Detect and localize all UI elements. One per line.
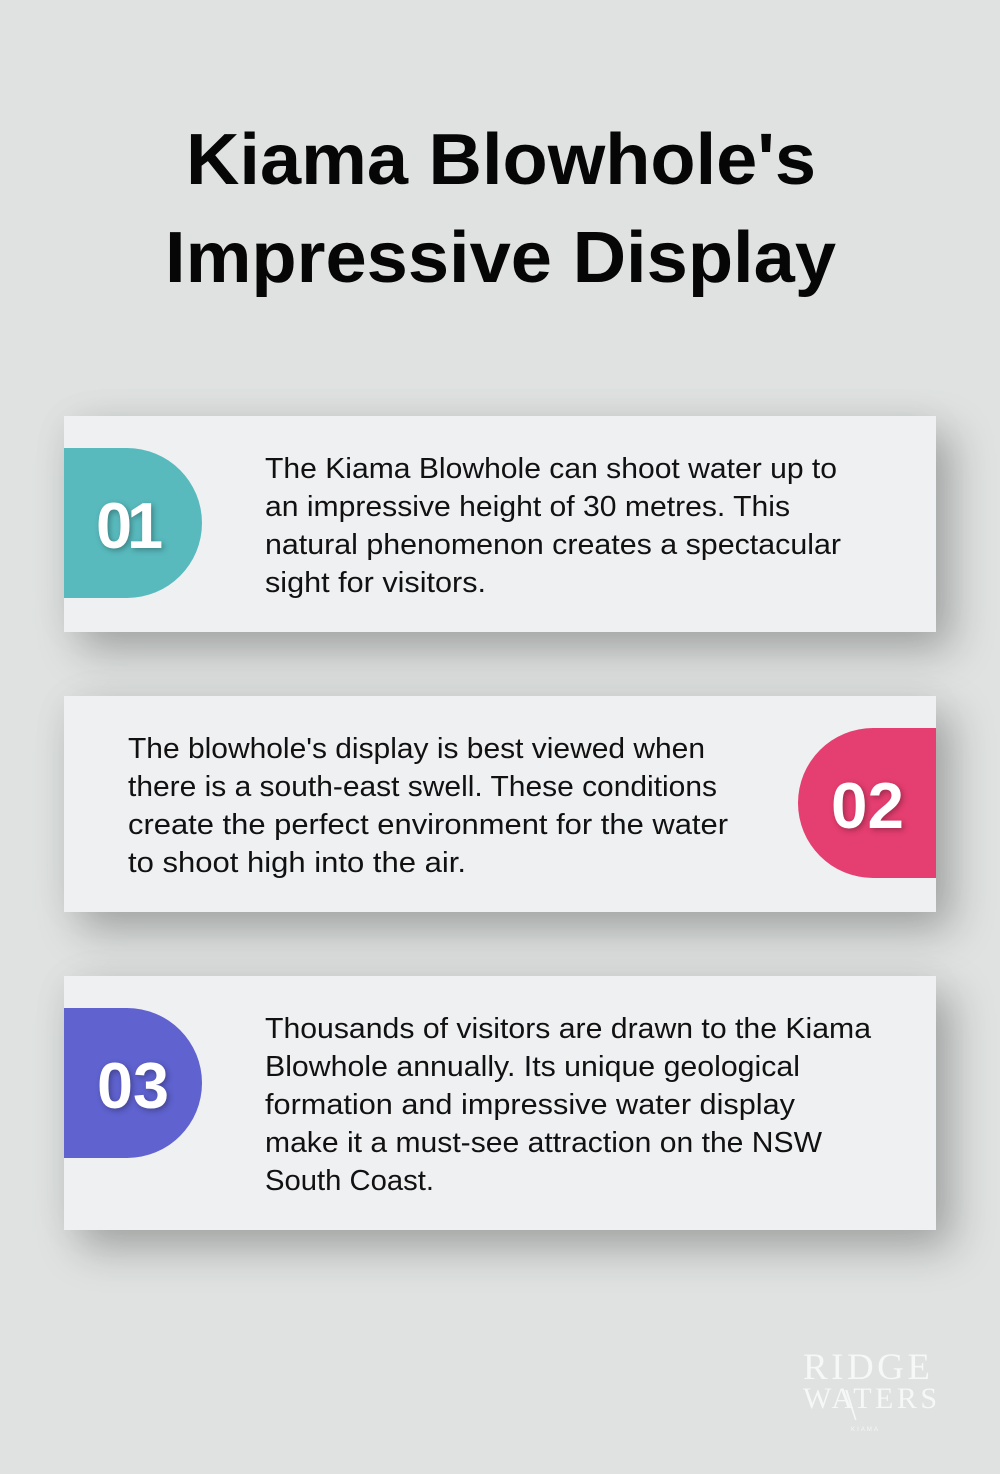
text: fact 01: natural phenomenon creates a spectacular [265,529,841,561]
text: fact 01: The Kiama Blowhole can shoot water up to [265,453,837,485]
text: fact 02: The blowhole's display is best viewed when [128,733,705,765]
text: fact 02: there is a south-east swell. These conditions [128,771,717,803]
logo: Ridge Waters Kiama: RIDGE [803,1347,930,1388]
logo: Ridge Waters Kiama: KIAMA [851,1427,878,1433]
text: fact 03: make it a must-see attraction on the NSW [265,1127,823,1159]
text: fact 02: create the perfect environment for the water [128,809,728,841]
panel: fact 02 [64,696,936,912]
badge: 03 [64,1008,202,1158]
text: fact 01: an impressive height of 30 metres. This [265,491,790,523]
panel: fact 03 [64,976,936,1230]
title [165,120,836,298]
text: fact 03: formation and impressive water display [265,1089,796,1121]
text: fact 01: sight for visitors. [265,567,486,599]
badge: 02: 02 [831,769,904,842]
badge: 01 [64,448,202,598]
panel: fact 01 [64,416,936,632]
badge: 03: 03 [97,1049,169,1122]
text: fact 02 [128,733,728,879]
text: fact 02: to shoot high into the air. [128,847,466,879]
text: fact 03: Thousands of visitors are drawn to the Kiama [265,1013,872,1045]
text: fact 03: South Coast. [265,1165,434,1197]
text: fact 03 [265,1013,872,1197]
text: fact 01 [265,453,841,599]
title: Impressive Display [165,218,836,298]
logo: Ridge Waters Kiama: WATERS [803,1382,937,1415]
title: Kiama Blowhole's [186,120,816,200]
badge: 02 [798,728,936,878]
text: fact 03: Blowhole annually. Its unique geological [265,1051,800,1083]
badge: 01: 01 [96,489,163,562]
